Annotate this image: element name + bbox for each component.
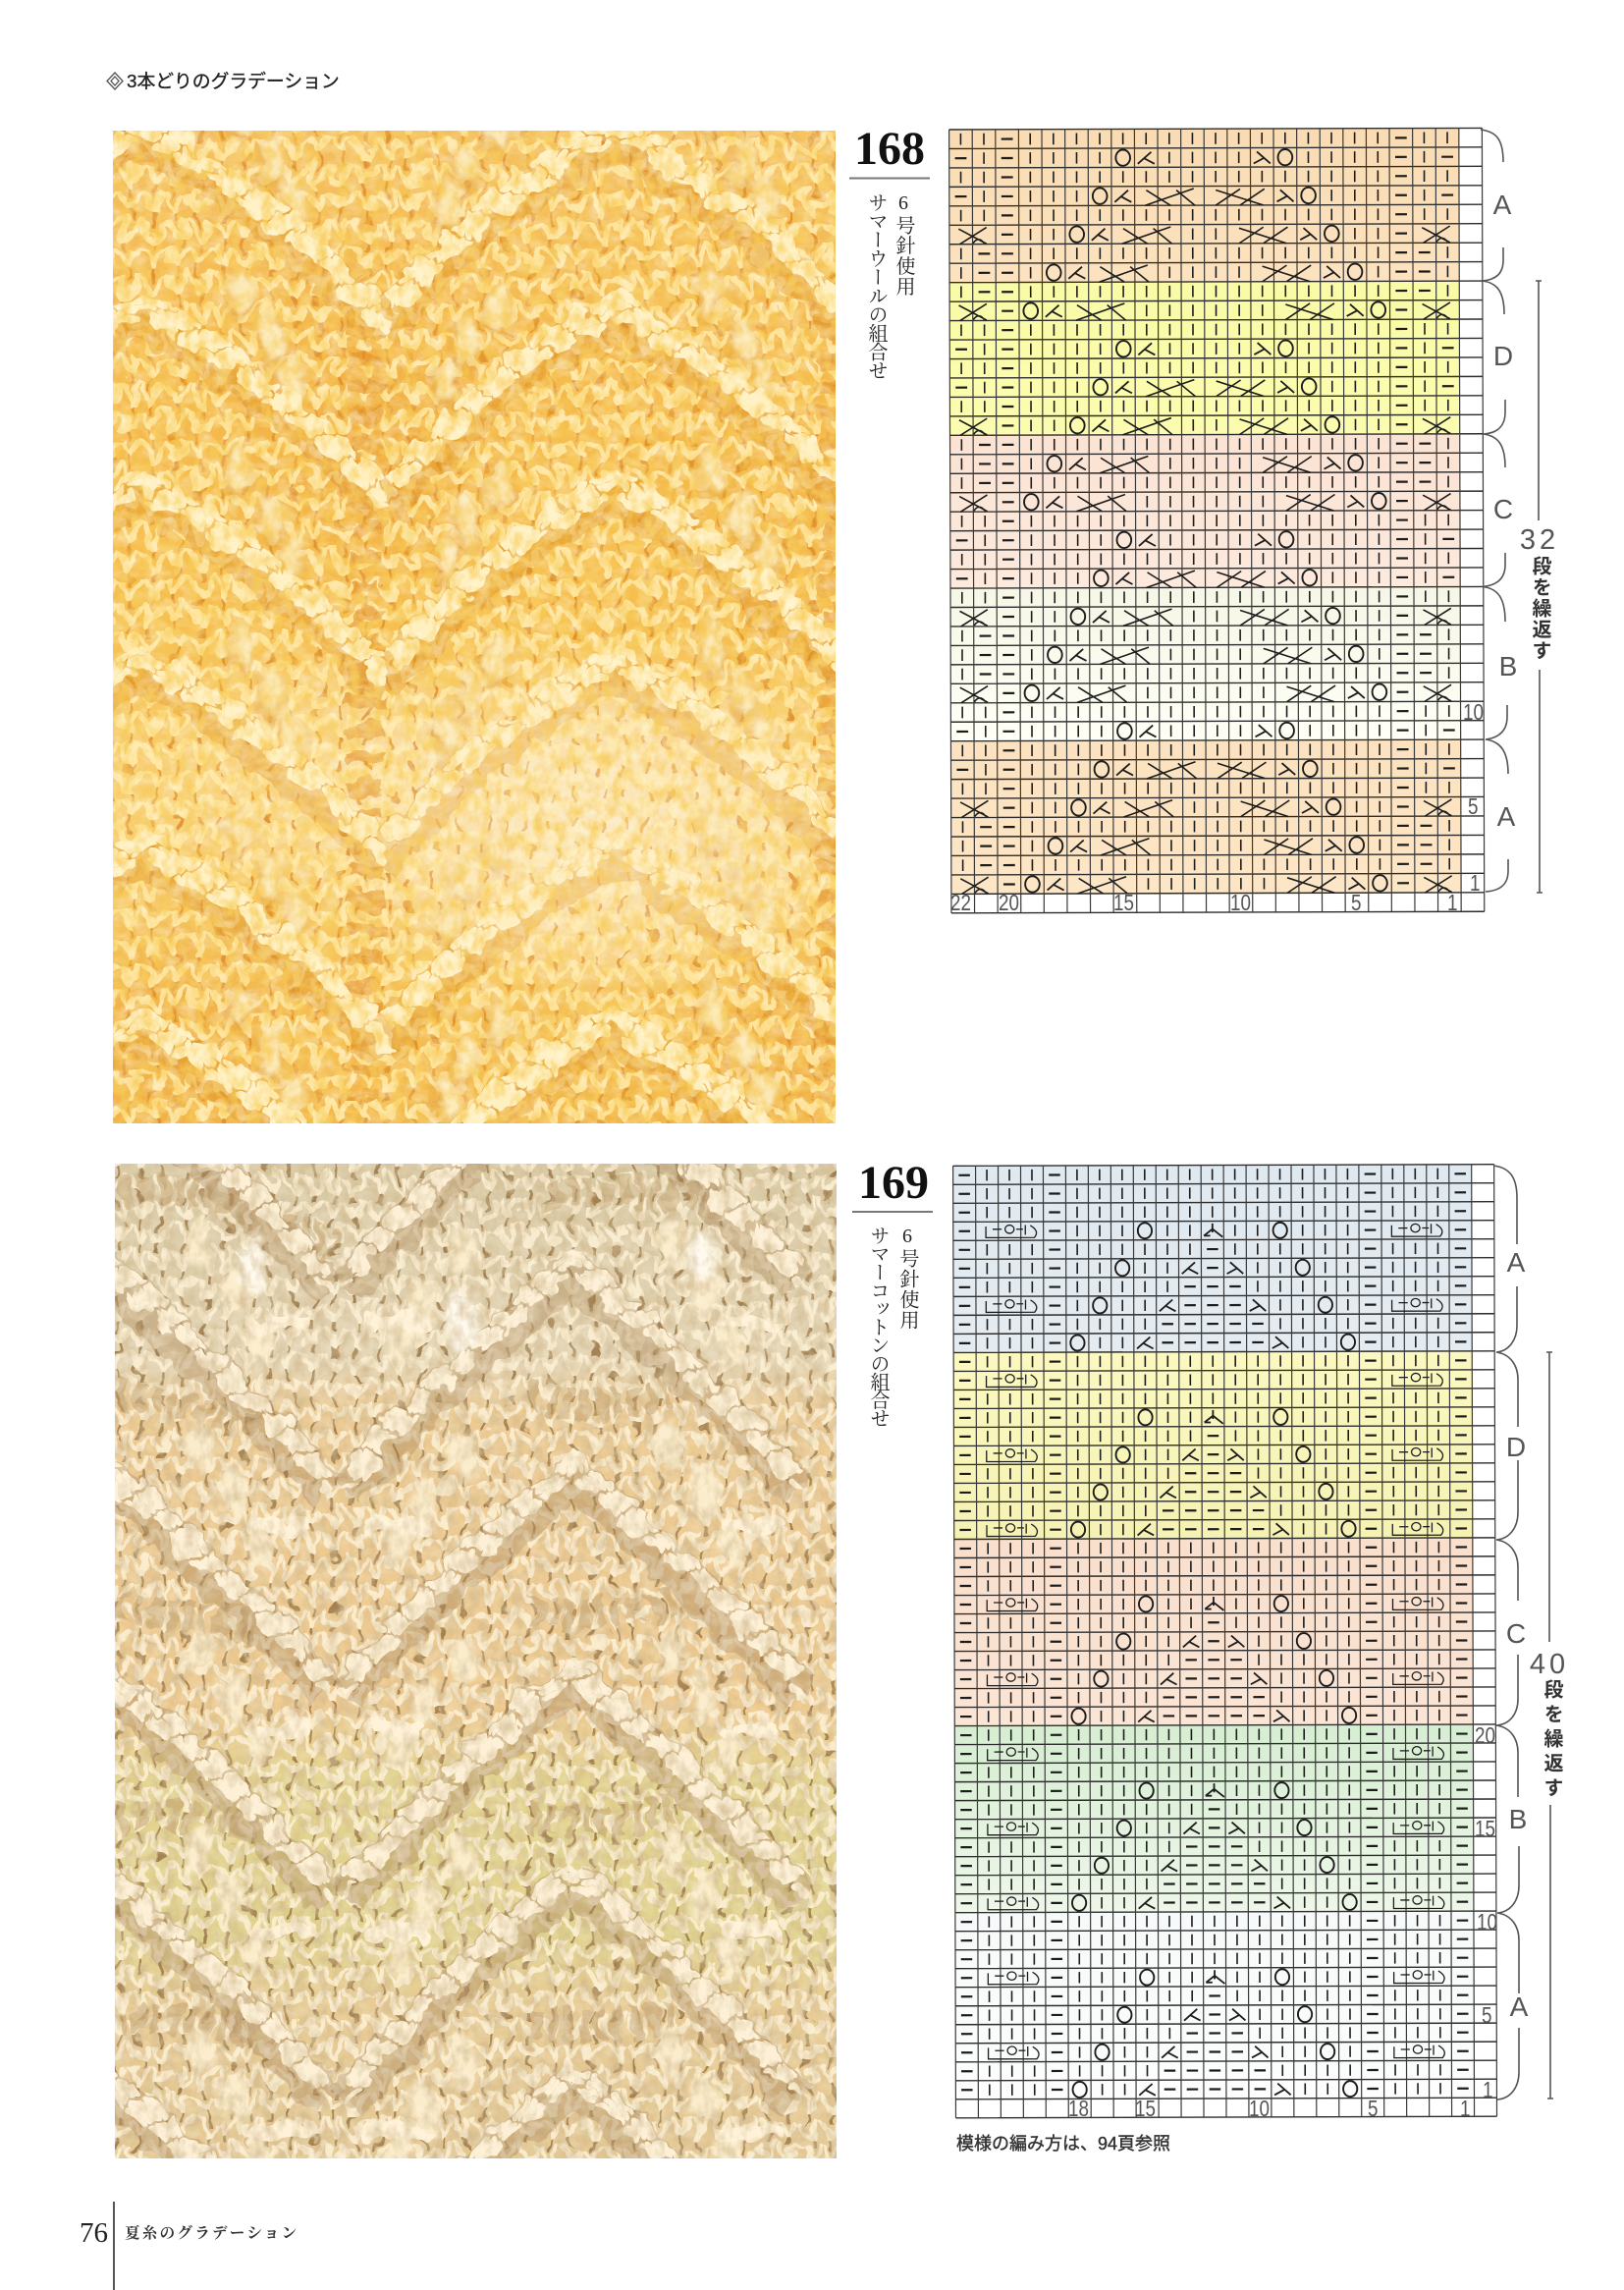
- brackets 168: [1481, 130, 1508, 892]
- running head: [107, 71, 340, 91]
- column and row numbers 168: 1: [1447, 891, 1457, 915]
- book title: 夏糸のグラデーション: [125, 2223, 298, 2242]
- page number: 76: [80, 2217, 108, 2249]
- brackets 169: [1493, 1166, 1519, 2099]
- chart 169: [953, 1165, 1569, 2121]
- repeat measure 169: 40: [1530, 1649, 1569, 1680]
- column and row numbers 169: 18: [1068, 2097, 1089, 2121]
- column and row numbers 168: 1: [1470, 871, 1480, 896]
- repeat measure 168: 段を繰返す: [1529, 556, 1551, 662]
- chart grid and symbols 168: [949, 128, 1485, 913]
- reference note: 模様の編み方は、94頁参照: [956, 2134, 1170, 2154]
- repeat measure 169: 段を繰返す: [1541, 1679, 1563, 1802]
- folio rule: [113, 2202, 115, 2290]
- swatch number 169: 169: [858, 1157, 929, 1209]
- heading text: 3本どりのグラデーション: [127, 71, 340, 91]
- bracket letters 168: B: [1499, 651, 1517, 682]
- column and row numbers 169: 10: [1477, 1910, 1497, 1935]
- chart grid and symbols 169: [953, 1165, 1497, 2118]
- bracket letters 169: [1506, 1247, 1529, 2022]
- bracket letters 168: A: [1493, 190, 1512, 220]
- column and row numbers 168: 5: [1468, 794, 1478, 819]
- repeat measure 168: [1520, 281, 1559, 893]
- column and row numbers 169: 1: [1483, 2078, 1492, 2102]
- column and row numbers 168: [950, 700, 1484, 915]
- photo: swatch 169: [115, 1164, 837, 2158]
- column and row numbers 169: 10: [1249, 2097, 1270, 2121]
- column and row numbers 169: 15: [1475, 1817, 1495, 1841]
- column and row numbers 168: 5: [1351, 891, 1361, 915]
- swatch number 168: 168: [854, 123, 925, 175]
- bracket letters 168: C: [1493, 494, 1513, 524]
- bracket letters 169: D: [1506, 1432, 1526, 1462]
- column and row numbers 169: 5: [1368, 2097, 1378, 2121]
- column and row numbers 169: 1: [1460, 2097, 1470, 2121]
- photo: swatch 168: [113, 131, 836, 1123]
- column and row numbers 169: 5: [1482, 2003, 1491, 2028]
- bracket letters 168: D: [1493, 341, 1513, 371]
- column and row numbers 168: 10: [1463, 700, 1484, 725]
- column and row numbers 168: 10: [1230, 891, 1251, 915]
- column and row numbers 168: 15: [1113, 891, 1134, 915]
- column and row numbers 169: [1068, 1723, 1497, 2121]
- bracket letters 169: A: [1507, 1247, 1526, 1278]
- column and row numbers 169: 15: [1135, 2097, 1156, 2121]
- bracket letters 168: A: [1497, 801, 1516, 832]
- repeat measure 168: 32: [1520, 524, 1559, 556]
- bracket letters 168: [1493, 190, 1517, 832]
- needle note 169: 6号針使用: [896, 1226, 919, 1331]
- rule under number 168: [849, 177, 930, 179]
- column and row numbers 169: 20: [1475, 1723, 1495, 1748]
- yarn note 169: サマーコットンの組合せ: [867, 1226, 890, 1427]
- yarn note 168: サマーウールの組合せ: [865, 192, 888, 379]
- bracket letters 169: A: [1510, 1991, 1529, 2022]
- icon: diamond marker: [107, 73, 123, 89]
- column and row numbers 168: 20: [999, 891, 1019, 915]
- needle note 168: 6号針使用: [893, 192, 915, 297]
- repeat measure 169: [1530, 1352, 1569, 2099]
- bracket letters 169: C: [1506, 1618, 1526, 1649]
- chart 168: [949, 128, 1559, 915]
- column and row numbers 168: 22: [950, 891, 971, 915]
- bracket letters 169: B: [1509, 1804, 1527, 1834]
- rule under number 169: [852, 1211, 933, 1213]
